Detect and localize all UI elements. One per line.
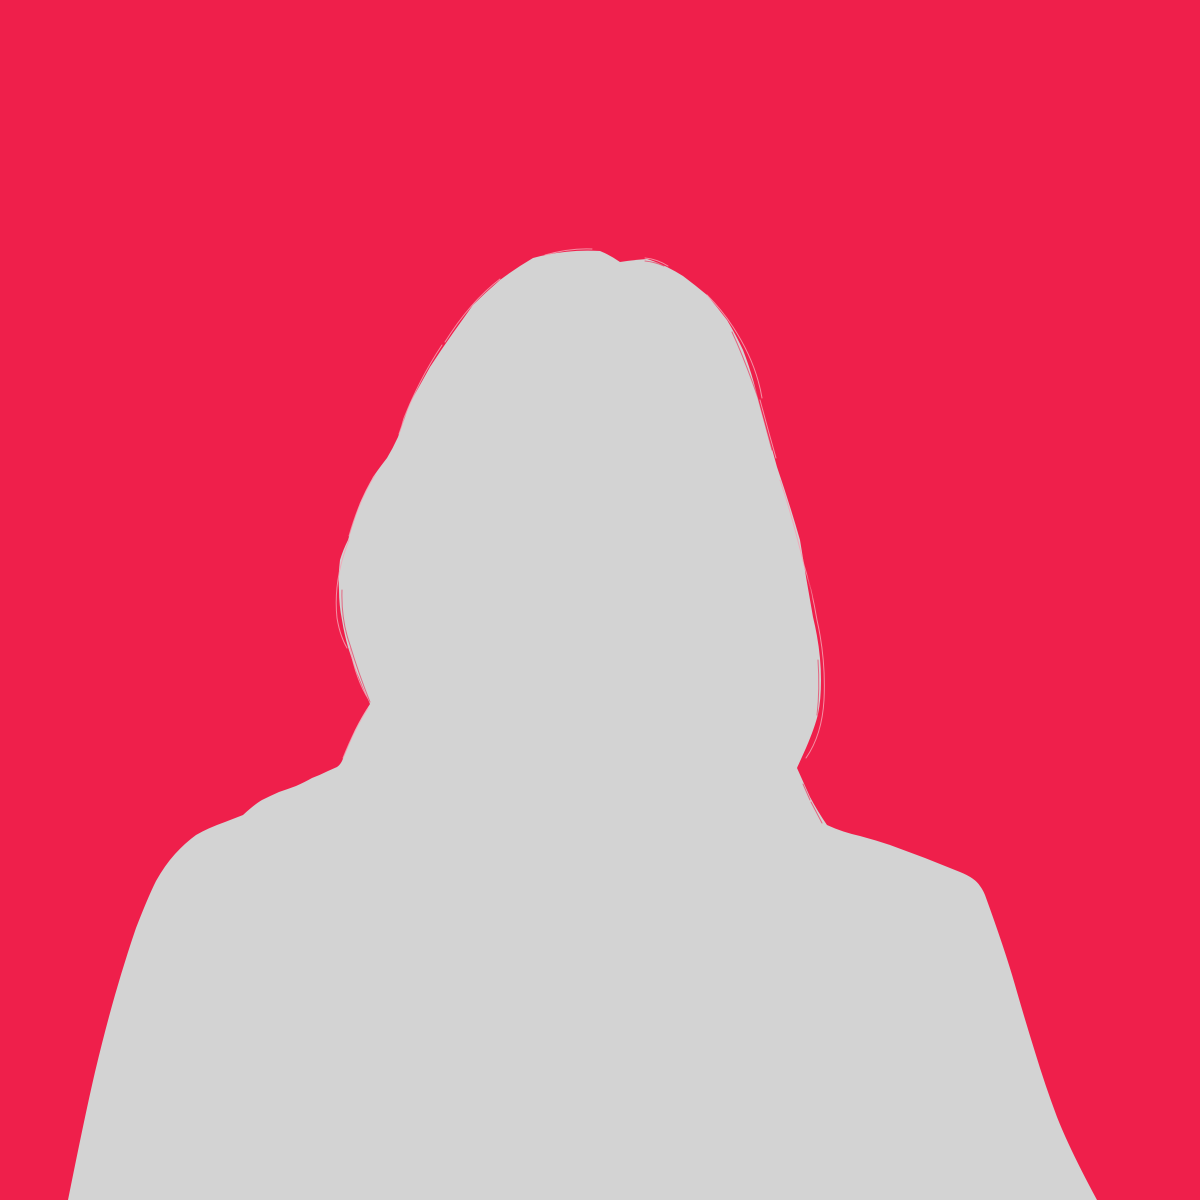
silhouette: woman with shoulder-length hair (68, 251, 1097, 1200)
hair strands: light wisps along the edge (336, 249, 824, 758)
hair strands: red wisps over the silhouette (342, 261, 822, 823)
